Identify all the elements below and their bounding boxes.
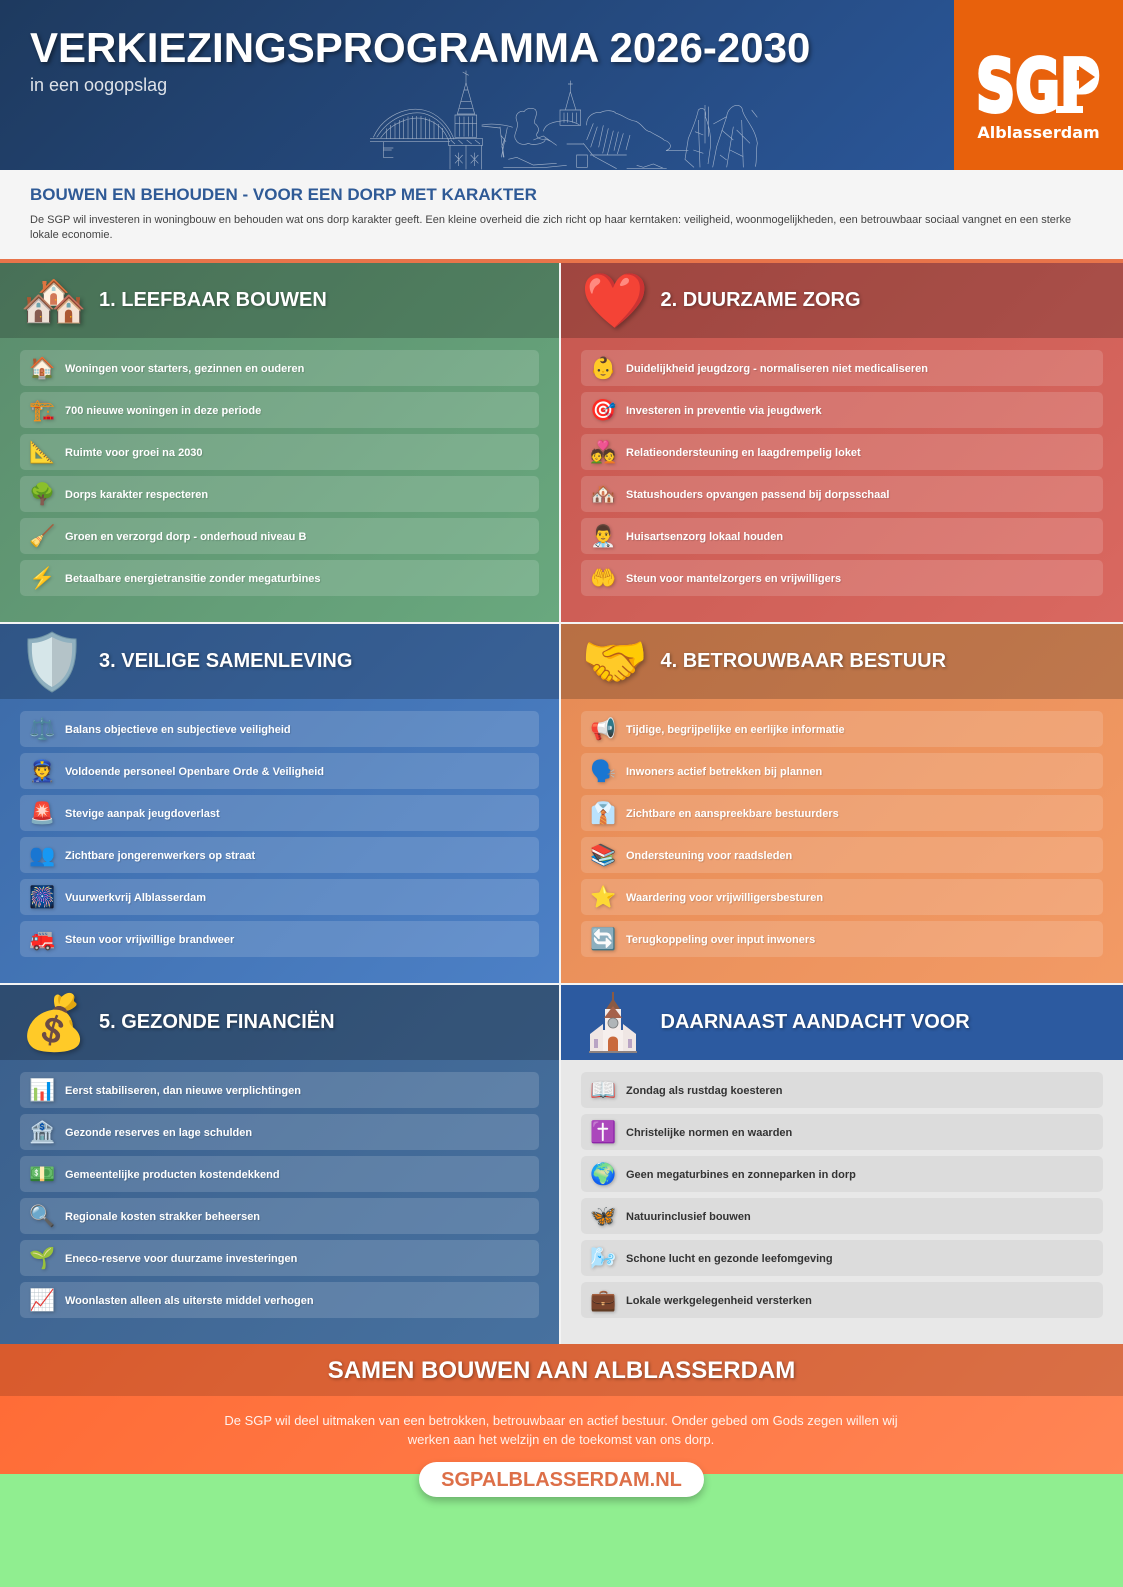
- heading: 1. LEEFBAAR BOUWEN: [99, 289, 327, 311]
- item list: 📖: [590, 1079, 616, 1103]
- item list: 🏠: [29, 357, 55, 381]
- item list: 🚒: [29, 928, 55, 952]
- item list: Dorps karakter respecteren: [65, 489, 208, 501]
- item list: Groen en verzorgd dorp - onderhoud niveau B: [65, 531, 306, 543]
- item list: 🌍: [590, 1163, 616, 1187]
- heading: 5. GEZONDE FINANCIËN: [99, 1011, 335, 1033]
- item list: Vuurwerkvrij Alblasserdam: [65, 892, 206, 904]
- intro heading: BOUWEN EN BEHOUDEN - VOOR EEN DORP MET KARAKTER: [30, 185, 537, 204]
- item list: Zondag als rustdag koesteren: [626, 1085, 782, 1097]
- item list: Ondersteuning voor raadsleden: [626, 850, 792, 862]
- panel header: [561, 263, 1123, 338]
- icon: handshake: 🤝: [581, 631, 648, 694]
- item list: [581, 350, 1103, 596]
- item list: Zichtbare en aanspreekbare bestuurders: [626, 808, 839, 820]
- icon: houses: 🏘️: [20, 270, 87, 333]
- website button: SGPALBLASSERDAM.NL: [441, 1469, 682, 1491]
- item list: [20, 350, 539, 596]
- item list: Investeren in preventie via jeugdwerk: [626, 405, 822, 417]
- item list: [20, 711, 539, 957]
- footer text: De SGP wil deel uitmaken van een betrokken, betrouwbaar en actief bestuur. Onder gebed om Gods zegen willen wij: [224, 1413, 898, 1428]
- item list: Woonlasten alleen als uiterste middel verhogen: [65, 1295, 314, 1307]
- item list: 👨‍⚕️: [590, 525, 616, 549]
- item list: 📊: [29, 1079, 55, 1103]
- item list: 🗣️: [590, 760, 616, 784]
- item list: Ruimte voor groei na 2030: [65, 447, 203, 459]
- panel header: [0, 263, 559, 338]
- item list: 🔍: [29, 1205, 55, 1229]
- item list: Woningen voor starters, gezinnen en ouderen: [65, 363, 304, 375]
- item list: 🌱: [29, 1247, 55, 1271]
- item list: Stevige aanpak jeugdoverlast: [65, 808, 220, 820]
- item list: ⚖️: [29, 718, 55, 742]
- item list: 💼: [590, 1289, 616, 1313]
- item list: 👮: [29, 760, 55, 784]
- white grid backing: [0, 263, 1123, 1344]
- title: VERKIEZINGSPROGRAMMA 2026-2030: [30, 24, 810, 71]
- logo block: [954, 0, 1123, 170]
- village skyline line drawing: [370, 70, 758, 170]
- footer: [0, 1344, 1123, 1474]
- item list: 👥: [29, 844, 55, 868]
- item list: Christelijke normen en waarden: [626, 1127, 792, 1139]
- item list: Relatieondersteuning en laagdrempelig loket: [626, 447, 861, 459]
- header banner: [0, 0, 1123, 170]
- panel: duurzame zorg: [561, 263, 1123, 622]
- intro block: [0, 170, 1123, 263]
- item list: 🏘️: [590, 483, 616, 507]
- heading: 3. VEILIGE SAMENLEVING: [99, 650, 352, 672]
- heading: 2. DUURZAME ZORG: [660, 289, 860, 311]
- item list: Statushouders opvangen passend bij dorpsschaal: [626, 489, 889, 501]
- item list: 🎯: [590, 399, 616, 423]
- item list: Eneco-reserve voor duurzame investeringen: [65, 1253, 297, 1265]
- item list: Zichtbare jongerenwerkers op straat: [65, 850, 255, 862]
- item list: Voldoende personeel Openbare Orde & Veiligheid: [65, 766, 324, 778]
- panel: leefbaar bouwen: [0, 263, 559, 622]
- icon: heart: ❤️: [581, 270, 648, 333]
- logo place name: Alblasserdam: [977, 123, 1100, 142]
- item list: [20, 1072, 539, 1318]
- item list: Tijdige, begrijpelijke en eerlijke informatie: [626, 724, 845, 736]
- intro text: De SGP wil investeren in woningbouw en behouden wat ons dorp karakter geeft. Een kleine overheid die zich richt op haar kerntaken: veiligheid, woonmogelijkheden, een betrouwbaar sociaal vangnet en een sterke lokale economie.: [30, 214, 1071, 241]
- panel header: [561, 624, 1123, 699]
- item list: ⚡: [29, 567, 55, 591]
- icon: money bag: 💰: [20, 992, 87, 1055]
- subtitle: in een oogopslag: [30, 75, 167, 95]
- panel header: [0, 624, 559, 699]
- item list: 👶: [590, 357, 616, 381]
- item list: 🦋: [590, 1205, 616, 1229]
- item list: 🔄: [590, 928, 616, 952]
- item list: ✝️: [590, 1121, 616, 1145]
- item list: Inwoners actief betrekken bij plannen: [626, 766, 822, 778]
- panel header: [0, 985, 559, 1060]
- item list: Betaalbare energietransitie zonder megaturbines: [65, 573, 321, 585]
- panel header: [561, 985, 1123, 1060]
- item list: 🏗️: [29, 399, 55, 423]
- icon: church: [589, 992, 637, 1053]
- item list: 700 nieuwe woningen in deze periode: [65, 405, 261, 417]
- item list: Steun voor mantelzorgers en vrijwilligers: [626, 573, 841, 585]
- icon: shield: [27, 632, 77, 692]
- panel: veilige samenleving: [0, 624, 559, 983]
- item list: Waardering voor vrijwilligersbesturen: [626, 892, 823, 904]
- item list: 📢: [590, 718, 616, 742]
- item list: 🚨: [29, 802, 55, 826]
- item list: Steun voor vrijwillige brandweer: [65, 934, 234, 946]
- item list: 🌬️: [590, 1247, 616, 1271]
- item list: [581, 711, 1103, 957]
- item list: 💑: [590, 441, 616, 465]
- item list: Terugkoppeling over input inwoners: [626, 934, 815, 946]
- item list: 📐: [29, 441, 55, 465]
- item list: 🎆: [29, 886, 55, 910]
- item list: 🌳: [29, 483, 55, 507]
- panel: daarnaast aandacht voor: [561, 985, 1123, 1344]
- item list: Balans objectieve en subjectieve veiligheid: [65, 724, 291, 736]
- item list: 🧹: [29, 525, 55, 549]
- item list: Geen megaturbines en zonneparken in dorp: [626, 1169, 856, 1181]
- item list: Schone lucht en gezonde leefomgeving: [626, 1253, 833, 1265]
- footer text: [224, 1413, 898, 1447]
- item list: 💵: [29, 1163, 55, 1187]
- footer text: werken aan het welzijn en de toekomst van ons dorp.: [408, 1432, 714, 1447]
- item list: [581, 1072, 1103, 1318]
- footer title bar: [0, 1344, 1123, 1396]
- item list: Regionale kosten strakker beheersen: [65, 1211, 260, 1223]
- item list: Gezonde reserves en lage schulden: [65, 1127, 252, 1139]
- panel: betrouwbaar bestuur: [561, 624, 1123, 983]
- item list: Huisartsenzorg lokaal houden: [626, 531, 783, 543]
- website button: [419, 1462, 704, 1497]
- item list: Eerst stabiliseren, dan nieuwe verplichtingen: [65, 1085, 301, 1097]
- heading: 4. BETROUWBAAR BESTUUR: [660, 650, 946, 672]
- item list: 🏦: [29, 1121, 55, 1145]
- item list: ⭐: [590, 886, 616, 910]
- item list: Duidelijkheid jeugdzorg - normaliseren niet medicaliseren: [626, 363, 928, 375]
- panel: gezonde financien: [0, 985, 559, 1344]
- item list: 🤲: [590, 567, 616, 591]
- heading: DAARNAAST AANDACHT VOOR: [660, 1011, 970, 1033]
- item list: Lokale werkgelegenheid versterken: [626, 1295, 812, 1307]
- item list: 📚: [590, 844, 616, 868]
- footer heading: SAMEN BOUWEN AAN ALBLASSERDAM: [328, 1357, 795, 1384]
- item list: Gemeentelijke producten kostendekkend: [65, 1169, 280, 1181]
- item list: 👔: [590, 802, 616, 826]
- item list: 📈: [29, 1289, 55, 1313]
- item list: Natuurinclusief bouwen: [626, 1211, 751, 1223]
